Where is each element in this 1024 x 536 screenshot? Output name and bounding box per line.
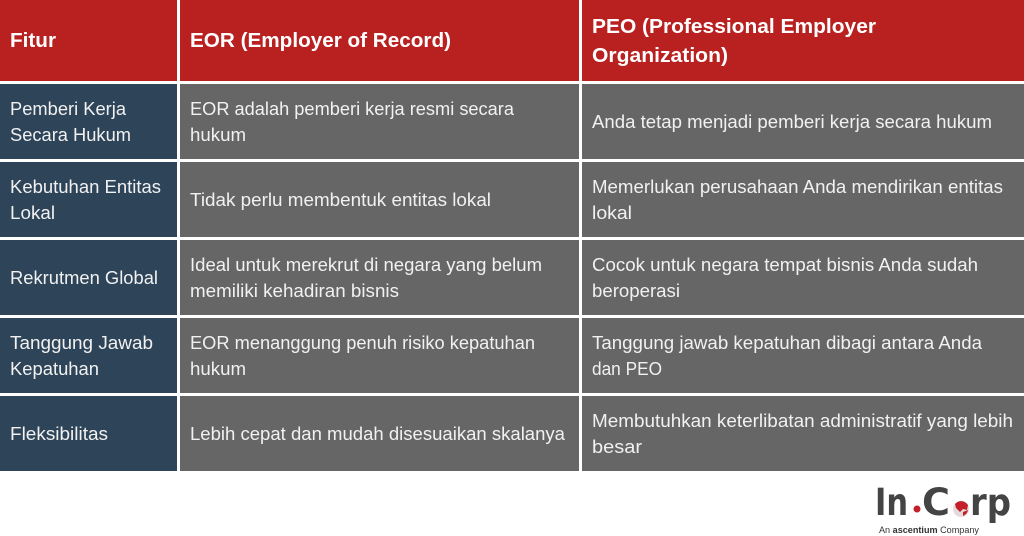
PEO cell	[582, 240, 1024, 315]
PEO cell: dan PEO	[592, 359, 662, 379]
PEO cell: Membutuhkan keterlibatan administratif yang lebih	[592, 411, 1013, 431]
PEO cell: beroperasi	[592, 281, 680, 301]
EOR cell	[180, 84, 579, 159]
wordmark C: C	[922, 481, 950, 524]
PEO cell	[582, 162, 1024, 237]
EOR cell: Ideal untuk merekrut di negara yang belum	[190, 255, 542, 275]
feature cell: Fleksibilitas	[10, 424, 108, 444]
EOR cell	[180, 318, 579, 393]
icon: globe	[953, 501, 969, 517]
tagline: An ascentium Company	[879, 525, 979, 535]
feature cell: Kebutuhan Entitas	[10, 177, 161, 197]
EOR cell	[180, 162, 579, 237]
row: Fleksibilitas	[0, 396, 1024, 471]
PEO cell: Anda tetap menjadi pemberi kerja secara hukum	[592, 112, 992, 132]
row: Tanggung Jawab Kepatuhan	[0, 318, 1024, 393]
PEO cell	[582, 396, 1024, 471]
header: EOR	[180, 0, 579, 81]
row: Pemberi Kerja Secara Hukum	[0, 84, 1024, 159]
PEO cell: Memerlukan perusahaan Anda mendirikan entitas	[592, 177, 1003, 197]
header: Fitur	[0, 0, 177, 81]
header: PEO	[582, 0, 1024, 81]
header: PEO: Organization)	[592, 45, 728, 67]
logo red dot	[914, 506, 920, 512]
feature cell	[0, 162, 177, 237]
PEO cell	[582, 84, 1024, 159]
feature cell: Kepatuhan	[10, 359, 99, 379]
PEO cell	[582, 318, 1024, 393]
EOR cell: EOR menanggung penuh risiko kepatuhan	[190, 333, 535, 353]
header: EOR: EOR (Employer of Record)	[190, 30, 451, 52]
feature cell: Tanggung Jawab	[10, 333, 153, 353]
EOR cell: Tidak perlu membentuk entitas lokal	[190, 190, 491, 210]
EOR cell	[180, 396, 579, 471]
header: PEO: PEO (Professional Employer	[592, 16, 876, 38]
feature cell: Pemberi Kerja	[10, 99, 127, 119]
feature cell	[0, 396, 177, 471]
feature cell	[0, 240, 177, 315]
header row	[0, 0, 1024, 81]
logo: InCorp	[875, 481, 1011, 535]
EOR cell: hukum	[190, 125, 246, 145]
EOR cell: memiliki kehadiran bisnis	[190, 281, 399, 301]
EOR cell: EOR adalah pemberi kerja resmi secara	[190, 99, 515, 119]
row: Kebutuhan Entitas Lokal	[0, 162, 1024, 237]
feature cell: Secara Hukum	[10, 125, 131, 145]
feature cell	[0, 84, 177, 159]
feature cell: Lokal	[10, 203, 55, 223]
feature cell: Rekrutmen Global	[10, 268, 158, 288]
feature cell	[0, 318, 177, 393]
PEO cell: Cocok untuk negara tempat bisnis Anda sudah	[592, 255, 978, 275]
PEO cell: besar	[592, 437, 642, 457]
wordmark rp: rp	[970, 481, 1011, 524]
EOR cell	[180, 240, 579, 315]
PEO cell: lokal	[592, 203, 632, 223]
EOR cell: Lebih cepat dan mudah disesuaikan skalanya	[190, 424, 566, 444]
PEO cell: Tanggung jawab kepatuhan dibagi antara Anda	[592, 333, 983, 353]
row: Rekrutmen Global	[0, 240, 1024, 315]
wordmark In: In	[875, 481, 908, 524]
header: Fitur: Fitur	[10, 30, 56, 52]
EOR cell: hukum	[190, 359, 246, 379]
